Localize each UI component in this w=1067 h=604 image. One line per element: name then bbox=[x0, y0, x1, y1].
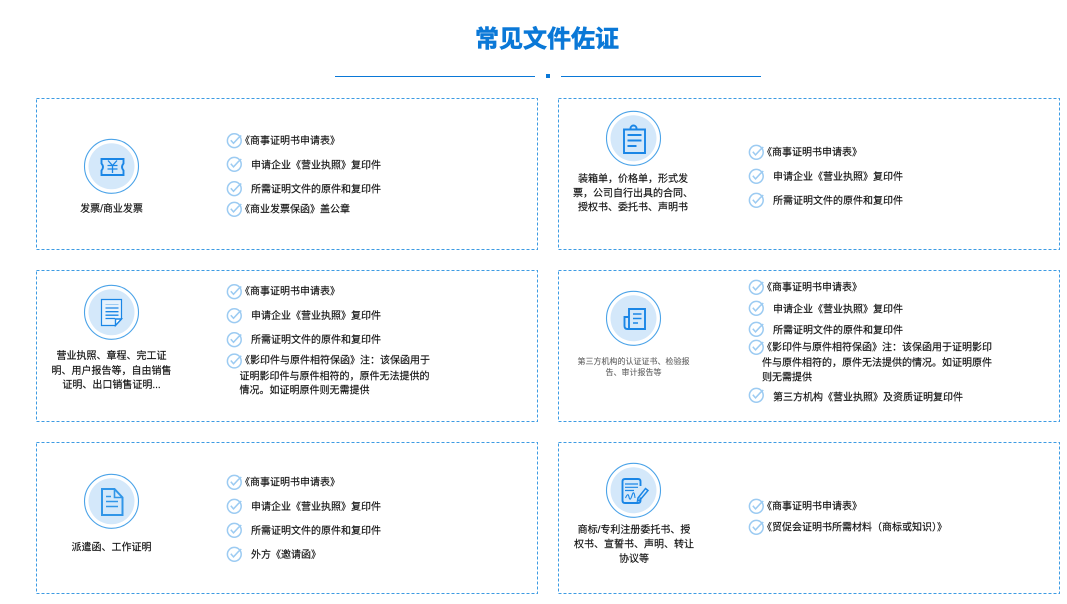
checklist bbox=[227, 475, 381, 561]
checklist: 《商事证明书申请表》 bbox=[762, 146, 862, 159]
checklist bbox=[749, 499, 947, 534]
checklist: 所需证明文件的原件和复印件 bbox=[251, 524, 381, 537]
checklist: 《影印件与原件相符保函》注：该保函用于 bbox=[240, 354, 430, 366]
label: 派遣函、工作证明 bbox=[72, 540, 152, 553]
checklist: 所需证明文件的原件和复印件 bbox=[251, 182, 381, 196]
checklist: 申请企业《营业执照》复印件 bbox=[773, 302, 903, 315]
panel: commercial invoice bbox=[36, 98, 538, 250]
label: 告、审计报告等 bbox=[606, 367, 662, 377]
label bbox=[52, 349, 172, 391]
label: 营业执照、章程、完工证 bbox=[56, 349, 166, 362]
label: 授权书、委托书、声明书 bbox=[578, 201, 688, 214]
checklist: 申请企业《营业执照》复印件 bbox=[251, 500, 381, 513]
icon: newspaper bbox=[606, 291, 660, 345]
checklist: 件与原件相符的，原件无法提供的情况。如证明原件 bbox=[762, 356, 992, 369]
checklist bbox=[749, 280, 992, 404]
label: 证明、出口销售证明... bbox=[62, 378, 161, 391]
checklist: 《商业发票保函》盖公章 bbox=[240, 202, 350, 216]
label: 协议等 bbox=[619, 552, 649, 565]
checklist: 《商事证明书申请表》 bbox=[240, 476, 340, 488]
checklist: 所需证明文件的原件和复印件 bbox=[773, 194, 903, 207]
label bbox=[573, 172, 693, 214]
label bbox=[578, 356, 690, 377]
panel: third-party certificates bbox=[558, 270, 1060, 422]
checklist bbox=[227, 134, 381, 216]
panel: packing list bbox=[558, 98, 1060, 250]
checklist: 《商事证明书申请表》 bbox=[240, 134, 340, 147]
checklist: 《商事证明书申请表》 bbox=[240, 284, 340, 298]
checklist: 申请企业《营业执照》复印件 bbox=[773, 170, 903, 183]
icon: clipboard bbox=[606, 111, 660, 165]
panel: dispatch letter bbox=[36, 442, 538, 594]
label: 装箱单，价格单，形式发 bbox=[578, 172, 688, 185]
checklist: 《贸促会证明书所需材料（商标或知识）》 bbox=[762, 520, 947, 533]
title: 常见文件佐证 bbox=[475, 25, 619, 53]
icon: file bbox=[84, 474, 138, 528]
checklist: 《商事证明书申请表》 bbox=[762, 499, 862, 512]
checklist: 外方《邀请函》 bbox=[251, 548, 321, 561]
checklist: 申请企业《营业执照》复印件 bbox=[251, 309, 381, 322]
label: 第三方机构的认证证书、检验报 bbox=[578, 356, 690, 366]
label: 发票/商业发票 bbox=[80, 202, 143, 215]
icon: ticket with yen bbox=[84, 139, 138, 193]
label: 商标/专利注册委托书、授 bbox=[578, 523, 690, 536]
checklist bbox=[227, 284, 430, 396]
title divider bbox=[335, 74, 761, 78]
icon: document bbox=[84, 285, 138, 339]
checklist: 情况。如证明原件则无需提供 bbox=[240, 384, 370, 396]
checklist: 《商事证明书申请表》 bbox=[762, 280, 862, 294]
panel: business license bbox=[36, 270, 538, 422]
panel: trademark and patent documents bbox=[558, 442, 1060, 594]
label bbox=[574, 523, 694, 565]
checklist bbox=[749, 145, 903, 207]
checklist: 则无需提供 bbox=[762, 370, 812, 384]
checklist: 《影印件与原件相符保函》注：该保函用于证明影印 bbox=[762, 340, 992, 354]
checklist: 证明影印件与原件相符的，原件无法提供的 bbox=[240, 370, 430, 382]
label: 票，公司自行出具的合同、 bbox=[573, 187, 693, 200]
checklist: 所需证明文件的原件和复印件 bbox=[251, 333, 381, 346]
checklist: 申请企业《营业执照》复印件 bbox=[251, 158, 381, 171]
label: 明、用户报告等，自由销售 bbox=[52, 364, 172, 377]
checklist: 所需证明文件的原件和复印件 bbox=[773, 323, 903, 336]
icon: signed document with pen bbox=[606, 463, 660, 517]
checklist: 第三方机构《营业执照》及资质证明复印件 bbox=[773, 390, 963, 404]
label: 权书、宣誓书、声明、转让 bbox=[574, 538, 694, 551]
